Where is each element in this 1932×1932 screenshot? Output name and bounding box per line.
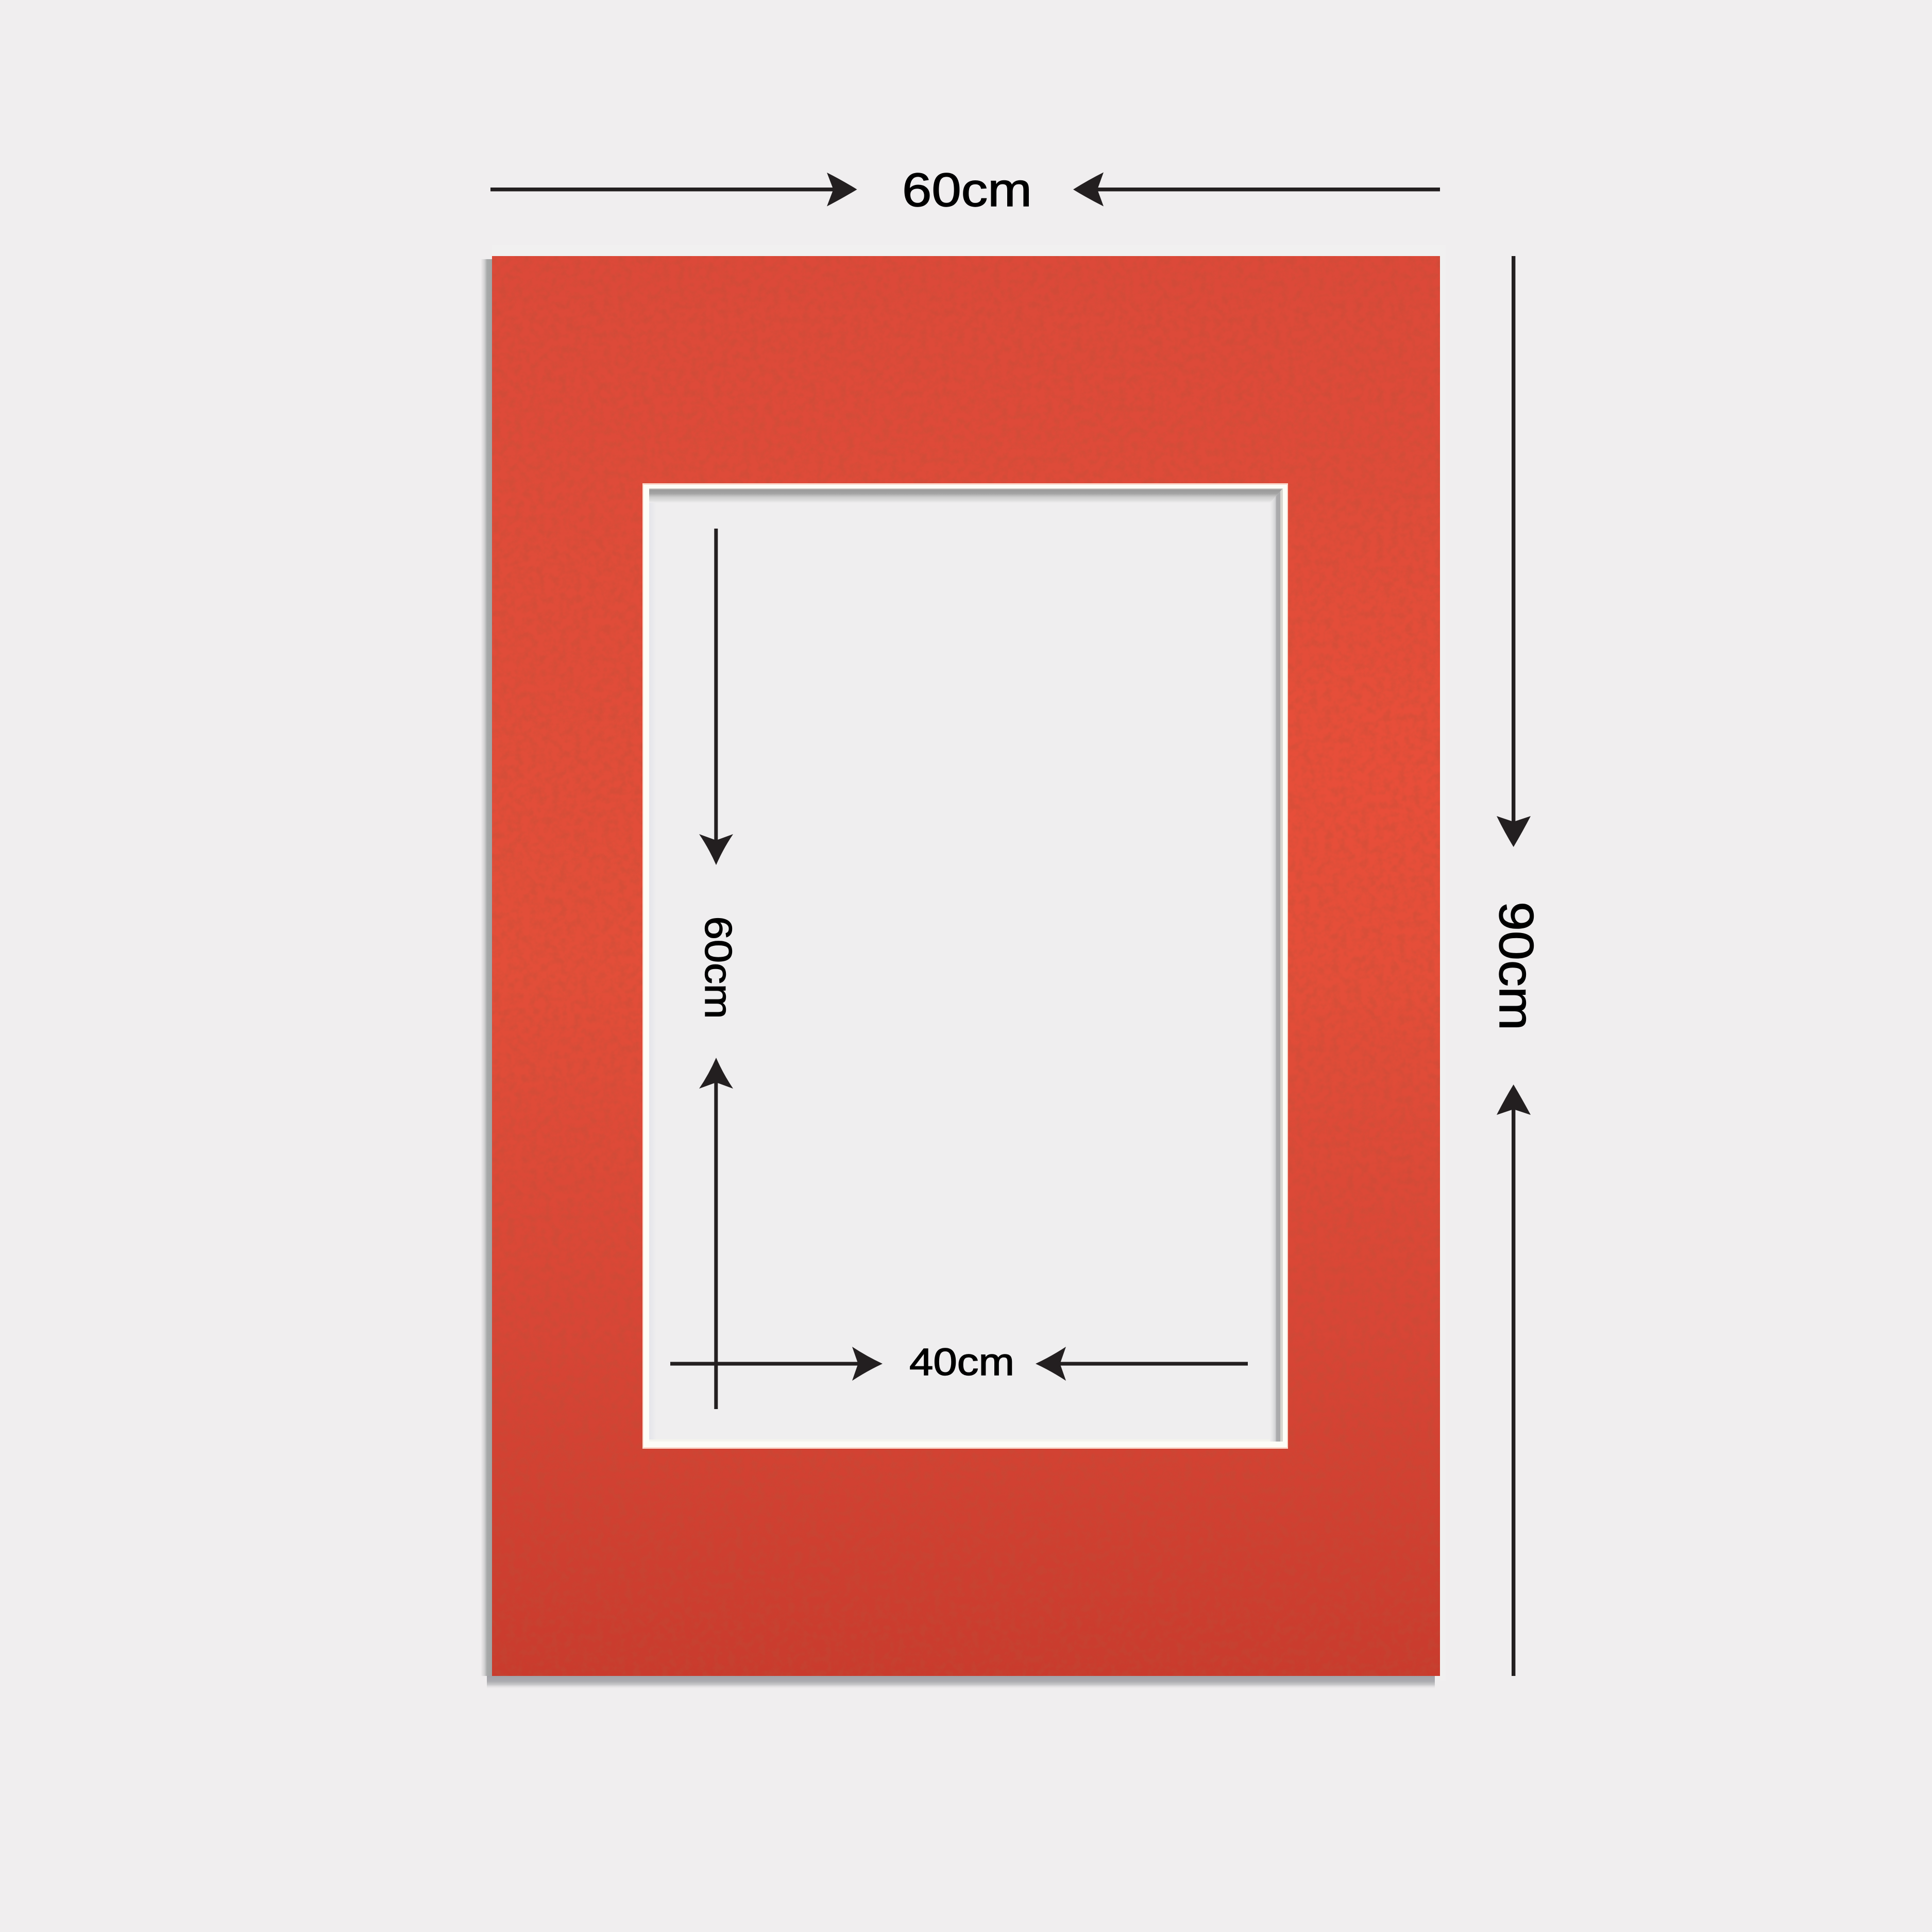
mat board highlight [492,256,1440,1676]
window right inner shadow [1270,488,1283,1442]
panel: red mat board [481,245,1446,1689]
arrow: top to bottom [699,529,733,865]
arrow: bottom to top [1497,1084,1531,1676]
bevel outer edge [642,483,1288,1449]
window: bevelled cut-out [642,483,1288,1449]
bevel white core [643,485,1287,1447]
label: 40cm: 40cm [909,1341,1014,1383]
arrow: left to right [670,1347,883,1381]
label: 60cm: 60cm [902,164,1032,216]
arrow: top to bottom [1497,256,1531,847]
window left inner shadow [649,488,656,1442]
dimension: outer width 60cm [490,164,1440,216]
window top inner shadow [649,488,1283,503]
window bottom cream edge [649,1439,1280,1442]
arrow: right to left [1073,172,1440,206]
arrow: bottom to top [699,1058,733,1409]
label: 90cm: 90cm [1489,902,1544,1030]
arrow: right to left [1036,1347,1248,1381]
label: 60cm: 60cm [697,916,739,1019]
mat board paper texture [492,256,1440,1676]
dimension: window width 40cm [670,1341,1248,1383]
mat board bottom shadow [487,1676,1435,1689]
mat board left shadow [481,259,492,1676]
mat board surface [492,256,1440,1676]
dimension: outer height 90cm [1489,256,1544,1676]
window interior [649,488,1283,1442]
mat board soft halo [492,245,1446,1681]
dimension: window height 60cm [697,529,739,1409]
arrow: left to right [490,173,857,206]
